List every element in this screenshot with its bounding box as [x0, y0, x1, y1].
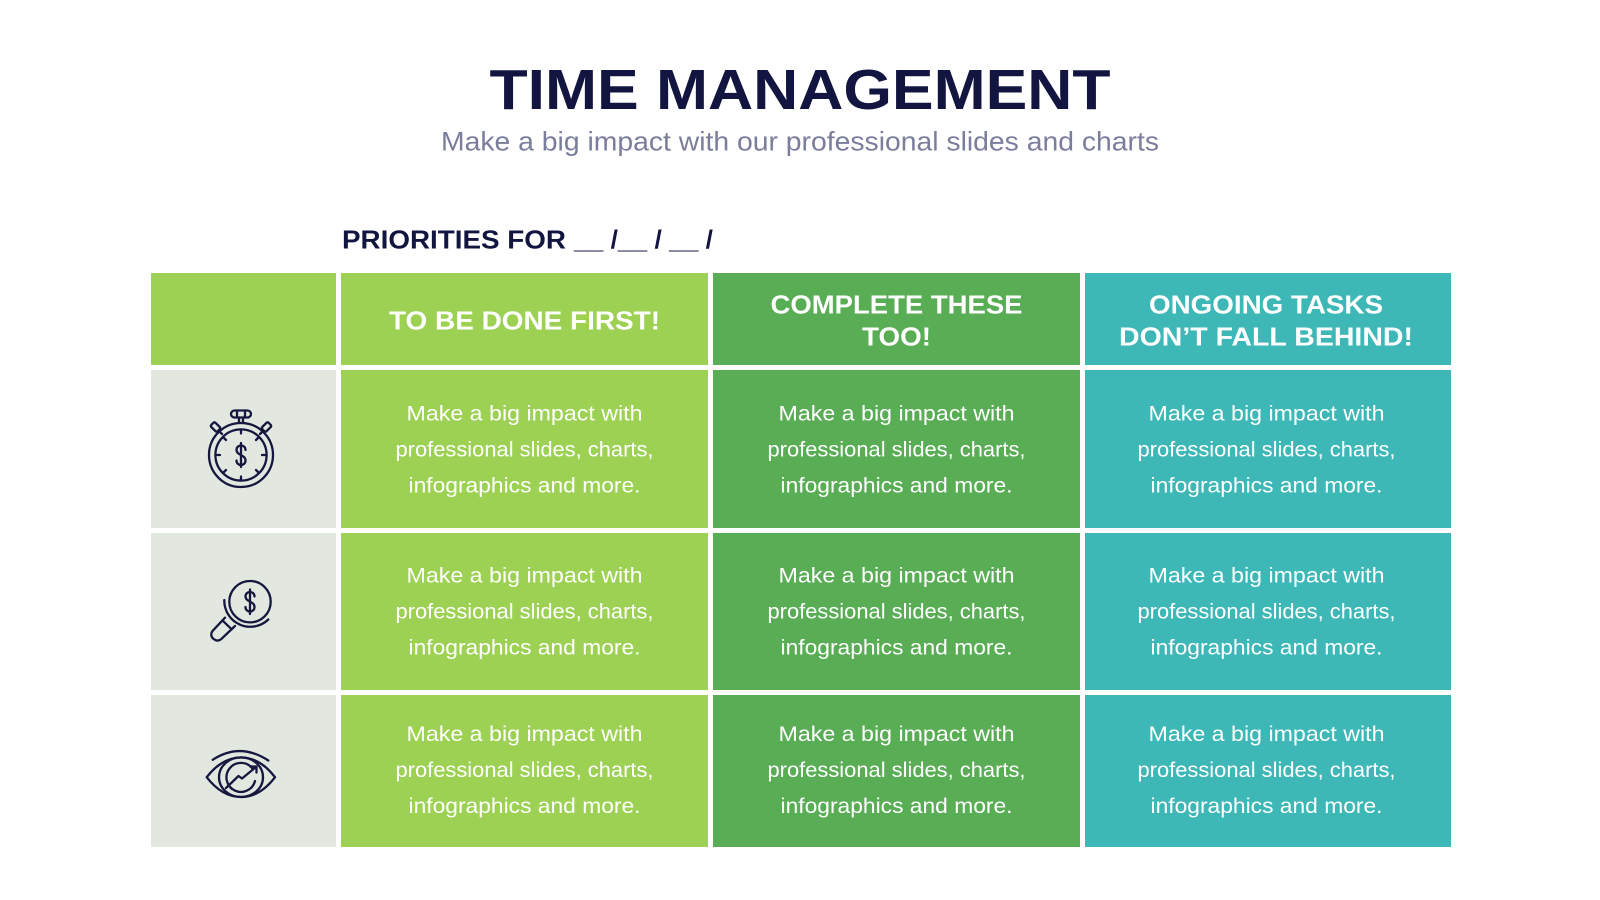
icon: eye with growth arrow — [207, 751, 275, 797]
priorities date heading: PRIORITIES FOR — [342, 224, 566, 254]
cell: row 1 second: Make a big impact with — [778, 402, 1014, 426]
cell: row 1 second: professional slides, charts, — [768, 438, 1026, 462]
row 2 — [151, 533, 1451, 690]
priorities date heading: __ /__ / __ / — [573, 224, 713, 254]
cell: row 1 third: Make a big impact with — [1148, 402, 1384, 426]
cell: row 1 second — [713, 370, 1080, 528]
row 3 — [151, 695, 1451, 847]
cell: row 3 second: infographics and more. — [780, 795, 1012, 818]
cell: row 3 second: Make a big impact with — [778, 723, 1014, 746]
cell: row 1 second: infographics and more. — [780, 474, 1012, 498]
empty header cell — [151, 273, 336, 365]
cell: row 3 third — [1085, 695, 1451, 847]
row 1 — [151, 370, 1451, 528]
header: complete these too: COMPLETE THESE — [770, 290, 1022, 320]
header: to be done first — [341, 273, 708, 365]
cell: row 1 first: professional slides, charts, — [396, 438, 654, 462]
header: ongoing tasks — [1085, 273, 1451, 365]
header row — [151, 273, 1451, 365]
cell: row 3 third: professional slides, charts, — [1138, 759, 1396, 782]
row 2 icon cell — [151, 533, 336, 690]
cell: row 2 first: Make a big impact with — [406, 564, 642, 588]
cell: row 3 third: infographics and more. — [1150, 795, 1382, 818]
cell: row 1 third — [1085, 370, 1451, 528]
cell: row 2 third — [1085, 533, 1451, 690]
cell: row 2 second — [713, 533, 1080, 690]
cell: row 2 first: infographics and more. — [408, 636, 640, 660]
cell: row 3 second — [713, 695, 1080, 847]
icon: stopwatch with dollar — [209, 410, 273, 487]
cell: row 1 first: Make a big impact with — [406, 402, 642, 426]
cell: row 2 first — [341, 533, 708, 690]
cell: row 2 second: infographics and more. — [780, 636, 1012, 660]
header: to be done first: TO BE DONE FIRST! — [389, 306, 660, 336]
row 1 icon cell — [151, 370, 336, 528]
header: ongoing tasks: DON’T FALL BEHIND! — [1119, 322, 1413, 352]
cell: row 3 first: infographics and more. — [408, 795, 640, 818]
cell: row 3 second: professional slides, charts, — [768, 759, 1026, 782]
cell: row 1 third: infographics and more. — [1150, 474, 1382, 498]
cell: row 3 first: Make a big impact with — [406, 723, 642, 746]
cell: row 2 third: infographics and more. — [1150, 636, 1382, 660]
priorities table — [151, 273, 1451, 847]
priorities date heading — [342, 224, 713, 254]
cell: row 2 second: professional slides, charts, — [768, 600, 1026, 624]
cell: row 1 first: infographics and more. — [408, 474, 640, 498]
cell: row 3 third: Make a big impact with — [1148, 723, 1384, 746]
cell: row 3 first: professional slides, charts, — [396, 759, 654, 782]
cell: row 1 third: professional slides, charts, — [1138, 438, 1396, 462]
header: complete these too: TOO! — [862, 322, 931, 352]
header: ongoing tasks: ONGOING TASKS — [1149, 290, 1383, 320]
row 3 icon cell — [151, 695, 336, 847]
cell: row 2 third: Make a big impact with — [1148, 564, 1384, 588]
cell: row 2 second: Make a big impact with — [778, 564, 1014, 588]
title: TIME MANAGEMENT — [490, 58, 1111, 122]
cell: row 3 first — [341, 695, 708, 847]
cell: row 2 third: professional slides, charts, — [1138, 600, 1396, 624]
subtitle: Make a big impact with our professional slides and charts — [441, 126, 1159, 156]
icon: magnifier with dollar — [211, 581, 271, 641]
header: complete these too — [713, 273, 1080, 365]
cell: row 2 first: professional slides, charts, — [396, 600, 654, 624]
cell: row 1 first — [341, 370, 708, 528]
